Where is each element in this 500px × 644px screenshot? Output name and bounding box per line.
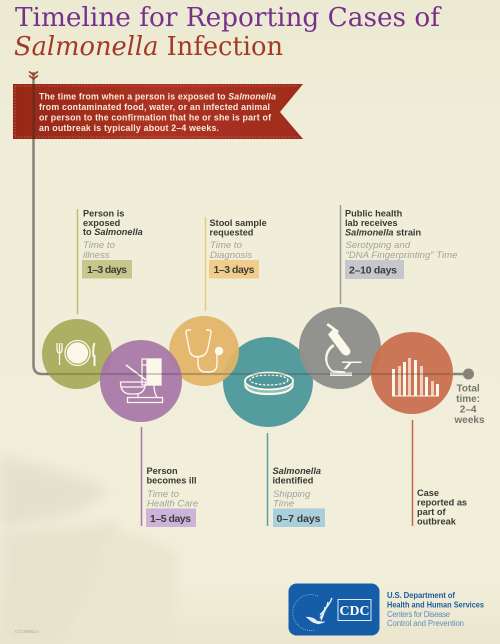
intro banner: or person to the confirmation that he or she is part of [39, 112, 271, 122]
step: public health lab: Serotyping and [346, 240, 411, 251]
step: stool sample requested: 1–3 days [214, 264, 255, 276]
step: salmonella identified: Shipping [273, 489, 311, 500]
intro banner: from contaminated food, water, or an infected animal [39, 102, 270, 112]
circle: terracotta, case reported [371, 332, 453, 414]
icon: HHS eagle emblem [293, 594, 332, 630]
total time label: time: [456, 394, 480, 405]
circle: olive, exposure [42, 319, 112, 389]
step: public health lab: lab receives [345, 218, 398, 228]
step: person becomes ill: Health Care [147, 498, 198, 510]
circle: purple, becomes ill [100, 340, 182, 422]
step: public health lab: Salmonella strain [345, 228, 421, 238]
step: person is exposed: exposed [83, 218, 120, 228]
step: person is exposed [82, 208, 143, 278]
step: person is exposed: illness [83, 250, 110, 261]
step: person is exposed: 1–3 days [87, 264, 127, 276]
circle: orange, diagnosis [169, 316, 239, 386]
step: stool sample requested: Diagnosis [210, 250, 252, 261]
circle: teal, identified [223, 337, 313, 427]
total time label: weeks [453, 415, 485, 426]
step: case reported: outbreak [417, 516, 457, 526]
step: person becomes ill: Person [146, 466, 178, 476]
step: case reported: part of [417, 507, 447, 517]
connector lines [78, 205, 412, 526]
icon: epidemic bar chart [392, 358, 439, 396]
logo text: department name: U.S. Department of [387, 591, 455, 600]
small document code: CS258951A [15, 629, 39, 634]
logo text: department name [387, 591, 485, 628]
step: case reported: Case [417, 488, 439, 498]
total time label: 2–4 [460, 404, 477, 416]
timeline line [34, 72, 466, 374]
step: salmonella identified [272, 466, 325, 527]
step: person becomes ill: Time to [147, 489, 180, 500]
circle: grey, public health lab [299, 307, 381, 389]
logo text: department name: Health and Human Services [387, 600, 485, 610]
step: stool sample requested: requested [210, 228, 253, 238]
title: Salmonella Infection [14, 32, 283, 62]
total time label: Total [457, 384, 480, 394]
intro banner [13, 84, 303, 139]
icon: plate and cutlery [57, 340, 94, 366]
step: public health lab: 2–10 days [349, 264, 397, 276]
logo text: department name: Control and Prevention [387, 619, 464, 628]
step: stool sample requested: Time to [210, 240, 243, 251]
step: person is exposed: Person is [83, 208, 124, 218]
step: person becomes ill: 1–5 days [150, 513, 191, 525]
CDC wordmark: CDC [340, 604, 370, 619]
step: person becomes ill: becomes ill [146, 476, 197, 486]
step: stool sample requested [209, 218, 267, 278]
step: salmonella identified: 0–7 days [276, 513, 321, 525]
step: person is exposed: to Salmonella [83, 227, 143, 237]
step: person is exposed: Time to [83, 240, 116, 251]
logo: HHS CDC [288, 584, 380, 636]
logo text: department name: Centers for Disease [387, 610, 450, 619]
step: stool sample requested: Stool sample [210, 218, 267, 228]
intro banner: an outbreak is typically about 2–4 weeks. [39, 123, 219, 133]
icon: microscope [325, 323, 362, 376]
step: case reported: reported as [417, 498, 467, 508]
line shadow across circles [46, 373, 450, 375]
icon: petri dish [245, 372, 293, 394]
icon: stethoscope [186, 330, 222, 372]
step: public health lab: “DNA Fingerprinting” Time [346, 250, 458, 261]
step: public health lab [345, 208, 458, 279]
step: public health lab: Public health [345, 208, 403, 218]
step: salmonella identified: Time [273, 498, 294, 510]
step: salmonella identified: identified [272, 476, 313, 486]
intro banner: The time from when a person is exposed to Salmonella [39, 92, 276, 102]
icon: timeline start arrow [29, 72, 38, 79]
icon: toilet [120, 359, 162, 402]
title [14, 3, 442, 62]
timeline end dot [463, 368, 474, 380]
step: person becomes ill [146, 466, 198, 527]
step: salmonella identified: Salmonella [272, 466, 321, 476]
title: Timeline for Reporting Cases of [15, 3, 442, 33]
